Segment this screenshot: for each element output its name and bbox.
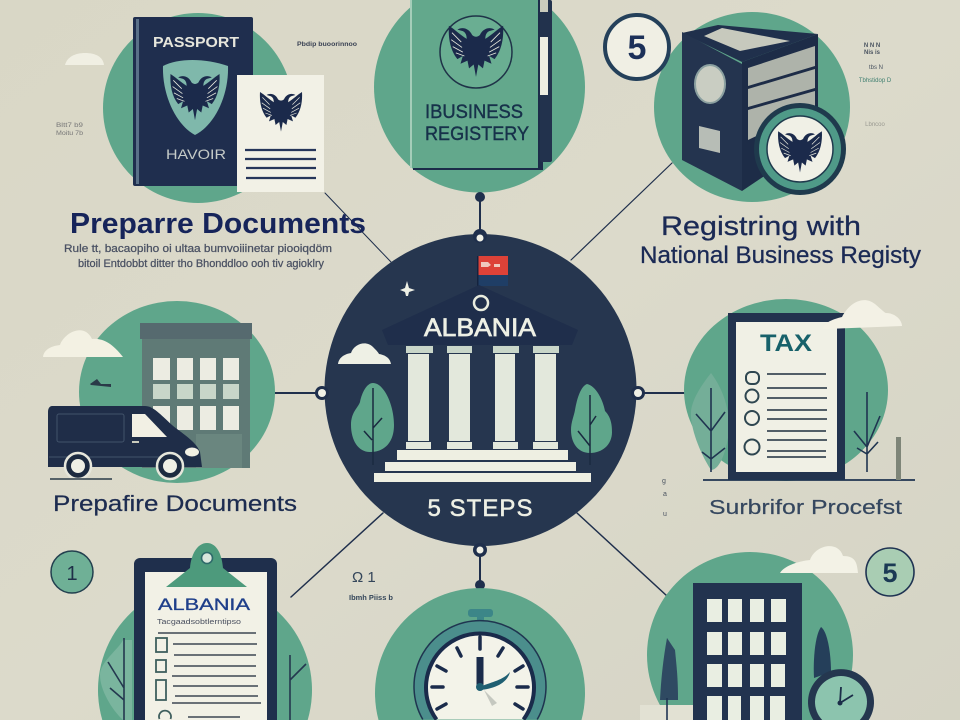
icon: clipboard: ALBANIA — [158, 595, 251, 614]
small note: Nis is — [864, 50, 881, 56]
icon: filing box — [682, 25, 818, 191]
icon: plane — [400, 281, 415, 296]
green circle — [684, 299, 888, 481]
small marks: g — [662, 478, 666, 485]
icon: delivery van — [48, 406, 202, 479]
small note: N N N — [864, 43, 880, 49]
green circle — [98, 583, 312, 720]
icon: passport: HAVOIR — [166, 146, 226, 162]
panel: checklist — [51, 543, 312, 720]
heading: Preparre Documents — [70, 208, 366, 240]
icon: flag — [477, 256, 508, 286]
icon: step number 5 — [605, 15, 669, 79]
icon: right tree — [571, 384, 612, 465]
icon: right cypress — [814, 627, 831, 678]
icon: clipboard — [134, 543, 277, 720]
icon: cloud — [780, 546, 858, 573]
heading — [640, 211, 921, 269]
green circle — [654, 12, 850, 202]
icon: bird — [90, 379, 111, 387]
icon: passport: PASSPORT — [153, 34, 239, 51]
icon: small clock — [808, 669, 874, 720]
panel: business registry — [374, 0, 585, 192]
icon: columns — [406, 346, 559, 449]
green circle — [79, 301, 275, 483]
icon: step number 5: 5 — [882, 558, 898, 588]
panel: office and clock — [640, 546, 914, 720]
icon: pen — [540, 0, 552, 162]
description text — [64, 243, 332, 270]
dark circle — [324, 234, 636, 546]
icon: roundel — [474, 296, 488, 310]
icon: document with emblem — [237, 75, 324, 192]
icon: steps — [374, 450, 591, 482]
panel: clock — [349, 569, 585, 720]
icon: clipboard: Tacgaadsobtlerntipso — [157, 619, 241, 626]
icon: left tree — [100, 640, 132, 720]
description text: bitoil Entdobbt ditter tho Bhonddloo ooh tiv agioklry — [78, 258, 324, 270]
small note: Pbdip buoorinnoo — [297, 42, 357, 48]
icon: cloud — [65, 53, 104, 65]
connector nodes — [315, 192, 645, 590]
small note: Bltt7 b9 — [56, 123, 84, 129]
icon: passport — [133, 17, 253, 186]
panel: central Albania emblem — [324, 234, 636, 546]
small marks: a — [663, 491, 667, 498]
small note — [56, 42, 357, 137]
ground line — [703, 479, 915, 481]
icon: registry book — [410, 0, 543, 170]
icon: cloud — [338, 343, 391, 364]
small note — [859, 43, 892, 128]
panel: tax submission — [662, 299, 915, 519]
icon: left tree — [691, 373, 729, 472]
heading: National Business Registy — [640, 242, 921, 269]
small note: Ibmh Piiss b — [349, 595, 393, 602]
heading: Registring with — [661, 211, 861, 241]
small note: Ω 1 — [352, 569, 376, 586]
icon: building pediment — [382, 285, 578, 345]
icon: registry book: REGISTERY — [425, 124, 529, 145]
icon: post — [896, 437, 901, 480]
green circle — [103, 13, 293, 203]
small note — [349, 569, 393, 602]
icon: cloud — [43, 330, 123, 357]
small marks — [662, 478, 667, 518]
icon: emblem seal — [754, 103, 846, 195]
panel: prepare documents — [56, 13, 366, 270]
heading: Surbrifor Procefst — [709, 497, 903, 519]
icon: step number 1 — [51, 551, 93, 593]
small marks: u — [663, 511, 667, 518]
description text: Rule tt, bacaopiho oi ultaa bumvoiiinetar piooiqdöm — [64, 243, 332, 255]
icon: step number 1: 1 — [66, 563, 78, 585]
icon: stopwatch — [414, 609, 546, 720]
small note: tbs N — [869, 65, 883, 71]
icon: left tree — [351, 383, 394, 465]
icon: step number 5 — [866, 548, 914, 596]
icon: tax document — [728, 313, 845, 480]
icon: ground block — [640, 705, 700, 720]
green circle — [647, 552, 853, 720]
connector lines — [275, 163, 684, 597]
icon: tall building — [693, 583, 802, 720]
icon: left cypress — [660, 638, 678, 720]
icon: tax document: TAX — [760, 330, 812, 357]
green circle — [374, 0, 585, 192]
heading: Prepafire Documents — [53, 491, 297, 516]
panel: building and van — [43, 301, 297, 516]
icon: step number 5: 5 — [628, 29, 646, 67]
small note: Moitu 7b — [56, 131, 84, 137]
subtitle: 5 STEPS — [428, 495, 532, 522]
icon: office building — [140, 323, 252, 468]
icon: right tree — [290, 655, 306, 720]
small note: Lbncoo — [865, 122, 886, 128]
green circle — [375, 588, 585, 720]
panel: registering with national business registry — [605, 12, 921, 269]
title: ALBANIA — [424, 314, 536, 342]
icon: registry book: IBUSINESS — [425, 102, 523, 123]
small note: Tbhstidop D — [859, 78, 892, 84]
icon: cloud — [823, 300, 902, 329]
icon: right tree — [854, 392, 880, 472]
